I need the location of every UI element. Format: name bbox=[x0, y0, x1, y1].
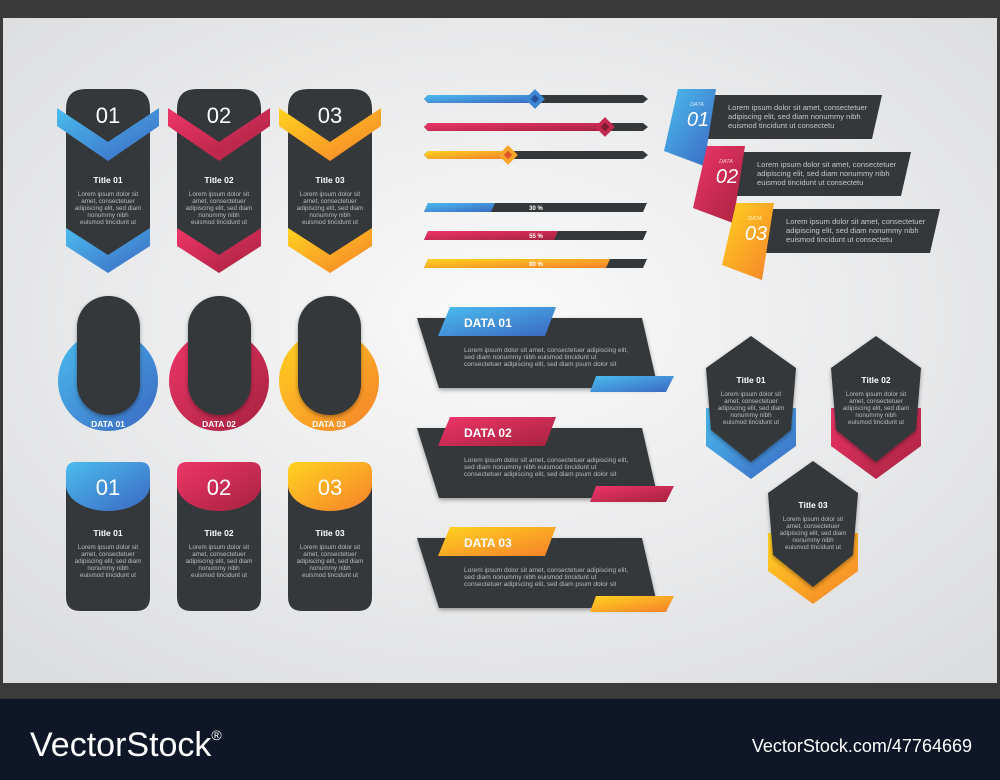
tab card 03 bbox=[288, 462, 372, 611]
data label 01: 01 bbox=[687, 109, 709, 131]
ribbon card 01: Title 01 bbox=[93, 175, 123, 185]
ribbon card 02: amet, consectetuer bbox=[192, 198, 246, 205]
slider 3 bbox=[424, 145, 648, 165]
hexagon 01: nonummy nibh bbox=[730, 412, 772, 419]
ribbon card 02: Lorem ipsum dolor sit bbox=[189, 191, 249, 198]
ribbon card 02: Title 02 bbox=[204, 175, 234, 185]
ribbon card 01: amet, consectetuer bbox=[81, 198, 135, 205]
ribbon card 03 bbox=[279, 89, 381, 273]
ribbon card 02: adipiscing elit, sed diam bbox=[186, 205, 252, 212]
data label 03: 03 bbox=[745, 223, 767, 245]
ribbon card 03: nonummy nibh bbox=[309, 212, 351, 219]
hexagon 03: Lorem ipsum dolor sit bbox=[783, 516, 843, 523]
data label 02: 02 bbox=[716, 166, 738, 188]
ribbon card 01: 01 bbox=[96, 103, 120, 128]
data label 01: Lorem ipsum dolor sit amet, consectetuer bbox=[728, 103, 868, 112]
tab card 01 bbox=[66, 462, 150, 611]
tab card 03: amet, consectetuer bbox=[303, 551, 357, 558]
progress bar 30% bbox=[424, 203, 647, 212]
tab card 02: adipiscing elit, sed diam bbox=[186, 558, 252, 565]
tab card 03: Lorem ipsum dolor sit bbox=[300, 544, 360, 551]
data banner 03: Lorem ipsum dolor sit amet, consectetuer adipiscing elit, bbox=[464, 567, 628, 574]
data banner 01: sed diam nonummy nibh euismod tincidunt ut bbox=[464, 354, 596, 361]
data label 01 bbox=[664, 89, 882, 166]
data banner 01: consectetuer adipiscing elit, sed diam psum dolor sit bbox=[464, 361, 617, 368]
hexagon 02: adipiscing elit, sed diam bbox=[843, 405, 909, 412]
hexagon 01 bbox=[706, 336, 796, 479]
ribbon card 03: Title 03 bbox=[315, 175, 345, 185]
tab card 02: 02 bbox=[207, 475, 231, 500]
ribbon card 02: nonummy nibh bbox=[198, 212, 240, 219]
ribbon card 03: amet, consectetuer bbox=[303, 198, 357, 205]
progress bar 55%: 55 % bbox=[529, 234, 543, 240]
tab card 01: euismod tincidunt ut bbox=[80, 572, 136, 579]
progress bar 30%: 30 % bbox=[529, 206, 543, 212]
hexagon 03: Title 03 bbox=[798, 500, 828, 510]
data label 02: Lorem ipsum dolor sit amet, consectetuer bbox=[757, 160, 897, 169]
ribbon card 03: 03 bbox=[318, 103, 342, 128]
pill badge 01: DATA 01 bbox=[91, 419, 125, 429]
progress bar 80% bbox=[424, 259, 647, 268]
hexagon 02: Title 02 bbox=[861, 375, 891, 385]
tab card 01: adipiscing elit, sed diam bbox=[75, 558, 141, 565]
data label 03 bbox=[722, 203, 940, 280]
data label 01: euismod tincidunt ut consectetu bbox=[728, 121, 834, 130]
tab card 03: Title 03 bbox=[315, 528, 345, 538]
data label 02 bbox=[693, 146, 911, 223]
data banner 03: consectetuer adipiscing elit, sed diam psum dolor sit bbox=[464, 581, 617, 588]
hexagon 01: euismod tincidunt ut bbox=[723, 419, 779, 426]
hexagon 01: Lorem ipsum dolor sit bbox=[721, 391, 781, 398]
pill badge 02 bbox=[169, 296, 269, 431]
data banner 02: DATA 02 bbox=[464, 426, 512, 440]
data label 03: adipiscing elit, sed diam nonummy nibh bbox=[786, 226, 919, 235]
hexagon 03 bbox=[768, 461, 858, 604]
footer: VectorStock bbox=[30, 726, 211, 764]
pill badge 03 bbox=[279, 296, 379, 431]
data banner 01 bbox=[417, 307, 674, 392]
hexagon 03: nonummy nibh bbox=[792, 537, 834, 544]
tab card 01: 01 bbox=[96, 475, 120, 500]
hexagon 01: adipiscing elit, sed diam bbox=[718, 405, 784, 412]
hexagon 02: nonummy nibh bbox=[855, 412, 897, 419]
data label 02: euismod tincidunt ut consectetu bbox=[757, 178, 863, 187]
ribbon card 01: adipiscing elit, sed diam bbox=[75, 205, 141, 212]
tab card 03: 03 bbox=[318, 475, 342, 500]
tab card 02 bbox=[177, 462, 261, 611]
pill badge 02: DATA 02 bbox=[202, 419, 236, 429]
data banner 02: sed diam nonummy nibh euismod tincidunt ut bbox=[464, 464, 596, 471]
data banner 02: consectetuer adipiscing elit, sed diam psum dolor sit bbox=[464, 471, 617, 478]
hexagon 02 bbox=[831, 336, 921, 479]
ribbon card 01: nonummy nibh bbox=[87, 212, 129, 219]
slider 2 bbox=[424, 117, 648, 137]
tab card 02: amet, consectetuer bbox=[192, 551, 246, 558]
ribbon card 03: Lorem ipsum dolor sit bbox=[300, 191, 360, 198]
ribbon card 03: adipiscing elit, sed diam bbox=[297, 205, 363, 212]
ribbon card 02: euismod tincidunt ut bbox=[191, 219, 247, 226]
data label 02: DATA bbox=[719, 159, 733, 165]
data label 01: DATA bbox=[690, 102, 704, 108]
hexagon 02: euismod tincidunt ut bbox=[848, 419, 904, 426]
progress bar 55% bbox=[424, 231, 647, 240]
hexagon 03: adipiscing elit, sed diam bbox=[780, 530, 846, 537]
ribbon card 02 bbox=[168, 89, 270, 273]
tab card 01: Title 01 bbox=[93, 528, 123, 538]
hexagon 03: euismod tincidunt ut bbox=[785, 544, 841, 551]
tab card 02: Lorem ipsum dolor sit bbox=[189, 544, 249, 551]
data label 02: adipiscing elit, sed diam nonummy nibh bbox=[757, 169, 890, 178]
tab card 01: Lorem ipsum dolor sit bbox=[78, 544, 138, 551]
data label 03: Lorem ipsum dolor sit amet, consectetuer bbox=[786, 217, 926, 226]
tab card 03: adipiscing elit, sed diam bbox=[297, 558, 363, 565]
tab card 01: nonummy nibh bbox=[87, 565, 129, 572]
ribbon card 01: euismod tincidunt ut bbox=[80, 219, 136, 226]
ribbon card 01: Lorem ipsum dolor sit bbox=[78, 191, 138, 198]
slider 1 bbox=[424, 89, 648, 109]
data banner 02: Lorem ipsum dolor sit amet, consectetuer adipiscing elit, bbox=[464, 457, 628, 464]
ribbon card 03: euismod tincidunt ut bbox=[302, 219, 358, 226]
data banner 01: DATA 01 bbox=[464, 316, 512, 330]
hexagon 03: amet, consectetuer bbox=[786, 523, 840, 530]
pill badge 03: DATA 03 bbox=[312, 419, 346, 429]
data banner 03: DATA 03 bbox=[464, 536, 512, 550]
data banner 03 bbox=[417, 527, 674, 612]
hexagon 01: Title 01 bbox=[736, 375, 766, 385]
data label 01: adipiscing elit, sed diam nonummy nibh bbox=[728, 112, 861, 121]
tab card 02: euismod tincidunt ut bbox=[191, 572, 247, 579]
hexagon 02: Lorem ipsum dolor sit bbox=[846, 391, 906, 398]
tab card 02: Title 02 bbox=[204, 528, 234, 538]
footer bbox=[0, 699, 1000, 780]
footer: VectorStock.com/47764669 bbox=[752, 736, 972, 756]
ribbon card 02: 02 bbox=[207, 103, 231, 128]
footer: ® bbox=[211, 727, 222, 743]
data banner 02 bbox=[417, 417, 674, 502]
data label 03: DATA bbox=[748, 216, 762, 222]
pill badge 01 bbox=[58, 296, 158, 431]
progress bar 80%: 80 % bbox=[529, 262, 543, 268]
hexagon 02: amet, consectetuer bbox=[849, 398, 903, 405]
ribbon card 01 bbox=[57, 89, 159, 273]
data label 03: euismod tincidunt ut consectetu bbox=[786, 235, 892, 244]
tab card 03: euismod tincidunt ut bbox=[302, 572, 358, 579]
data banner 03: sed diam nonummy nibh euismod tincidunt ut bbox=[464, 574, 596, 581]
tab card 01: amet, consectetuer bbox=[81, 551, 135, 558]
tab card 02: nonummy nibh bbox=[198, 565, 240, 572]
hexagon 01: amet, consectetuer bbox=[724, 398, 778, 405]
data banner 01: Lorem ipsum dolor sit amet, consectetuer adipiscing elit, bbox=[464, 347, 628, 354]
tab card 03: nonummy nibh bbox=[309, 565, 351, 572]
